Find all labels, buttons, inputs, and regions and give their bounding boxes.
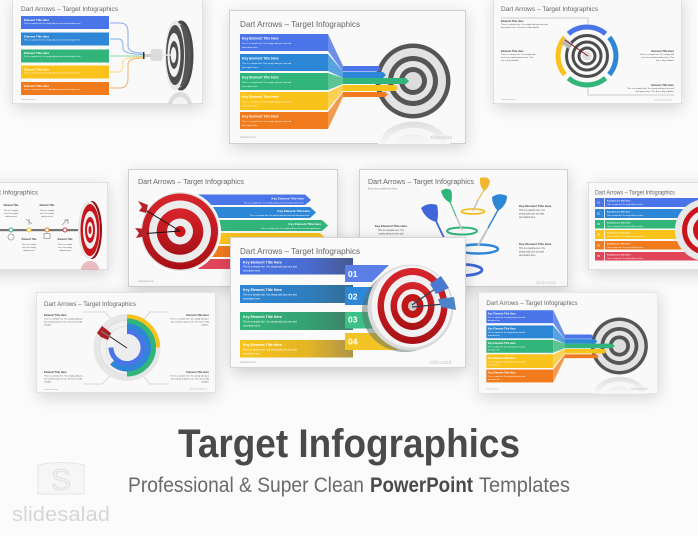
- panel: slide stacked arrows bottom right: This is a sample text. You simply add your text and: [488, 331, 525, 334]
- panel: featured slide numbered bars centre: Key Element Title Here: [243, 315, 282, 319]
- panel: slide stacked arrows bottom right: This is a sample text. You simply add your text and: [488, 360, 525, 363]
- panel: slide stacked arrows top centre: slidesalad: [430, 135, 452, 141]
- panel: featured slide numbered bars centre: Key Element Title Here: [243, 260, 282, 264]
- panel: slide stacked arrows bottom right: Key Element Title Here: [488, 341, 516, 345]
- panel: featured slide numbered bars centre: slidesalad.com: [240, 361, 256, 364]
- panel: featured slide numbered bars centre: 02: [348, 292, 358, 302]
- panel: slide timeline left: Element Title: [40, 204, 55, 207]
- panel: slide stacked arrows bottom right: This is a sample text. You simply add your text and: [488, 375, 525, 378]
- panel: slide flying darts: This is a sample text. You: [519, 209, 546, 212]
- panel: slide timeline left: add your text: [5, 215, 17, 218]
- panel: slide concentric arcs bottom left: slidesalad.com: [44, 389, 59, 391]
- panel: slide timeline left: [0, 182, 108, 279]
- panel: slide stacked arrows top centre: This is a sample text. You simply add your text and: [242, 81, 292, 84]
- panel: featured slide numbered bars centre: description here.: [243, 352, 261, 356]
- panel: slide ring target top right: Element Title Here: [501, 19, 524, 23]
- panel: slide stacked arrows bottom right: Key Element Title Here: [488, 327, 516, 331]
- panel: slide ring target top right: This is a sample text. You simply add: [640, 53, 675, 56]
- panel: slide stacked arrows bottom right: This is a sample text. You simply add your text and: [488, 316, 525, 319]
- panel: slide stacked arrows top centre: This is a sample text. You simply add your text and: [242, 42, 292, 45]
- panel: slide connector lines top left: Dart Arrows – Target Infographics: [21, 6, 118, 13]
- panel: slide stacked arrows top centre: description here.: [242, 46, 259, 49]
- panel: slide connector lines top left: Element Title Here: [24, 34, 50, 38]
- panel: slide ring target top right: description here. This text is fully editable.: [635, 90, 674, 93]
- panel: slide red target banners: slidesalad.com: [138, 280, 154, 283]
- panel: slide stacked arrows bottom right: description here.: [488, 378, 501, 381]
- panel: slide timeline left: text. You simply: [58, 246, 72, 249]
- panel: slide timeline left: text. You simply: [22, 246, 36, 249]
- panel: slide ring target top right: text is fully editable.: [501, 59, 520, 62]
- panel: slide stacked arrows bottom right: Key Element Title Here: [488, 371, 516, 375]
- panel: slide numbered rows right: Key Element Title Here: [607, 210, 631, 214]
- panel: slide flying darts: Enter your subtitle line here: [368, 188, 398, 190]
- panel: slide numbered rows right: 06: [597, 254, 601, 258]
- panel: slide stacked arrows top centre: slidesalad.com: [240, 136, 256, 139]
- panel: featured slide numbered bars centre: This is a sample text. You simply add your text and: [243, 294, 297, 296]
- panel: slide flying darts: simply add your text and: [379, 232, 404, 236]
- panel: slide numbered rows right: 01: [597, 200, 601, 204]
- subtitle: PowerPoint: [370, 474, 473, 497]
- panel: slide stacked arrows top centre: Key Element Title Here: [242, 76, 279, 80]
- subtitle: Templates: [479, 474, 570, 497]
- panel: slide red target banners: [128, 170, 338, 291]
- panel: slide numbered rows right: This is a sample text. You simply add your text here: [607, 246, 643, 249]
- panel: slide stacked arrows bottom right: description here.: [488, 334, 501, 337]
- panel: slide stacked arrows bottom right: description here.: [488, 349, 501, 352]
- panel: slide timeline left: This is a sample: [22, 244, 37, 246]
- panel: slide connector lines top left: This is a sample text. You simply add your text and description here.: [24, 38, 81, 42]
- panel: slide concentric arcs bottom left: editable.: [44, 380, 52, 384]
- panel: slide flying darts: Dart Arrows – Target Infographics: [368, 177, 474, 186]
- panel: slide numbered rows right: This is a sample text. You simply add your text here: [607, 235, 643, 238]
- panel: slide stacked arrows top centre: Dart Arrows – Target Infographics: [240, 19, 360, 29]
- panel: slide connector lines top left: Element Title Here: [24, 84, 50, 88]
- panel: featured slide numbered bars centre: This is a sample text. You simply add your text and: [243, 348, 297, 352]
- logo wordmark: slidesalad: [12, 504, 110, 526]
- icon: slidesalad logo: S: [51, 464, 71, 497]
- panel: slide connector lines top left: This is a sample text. You simply add your text and description here.: [24, 88, 81, 91]
- panel: slide ring target top right: your text and description here. This: [642, 56, 674, 59]
- title: Target Infographics: [178, 422, 520, 466]
- panel: slide stacked arrows top centre: [230, 10, 466, 148]
- panel: slide connector lines top left: [12, 0, 203, 120]
- panel: slide concentric arcs bottom left: This is a sample text. You simply add your: [170, 318, 209, 320]
- panel: slide ring target top right: This is a sample text. You simply add: [501, 53, 536, 56]
- panel: slide stacked arrows bottom right: slidesalad.com: [486, 388, 499, 390]
- panel: slide ring target top right: Dart Arrows – Target Infographics: [501, 6, 598, 13]
- panel: slide ring target top right: This is a sample text. You simply add your text and: [627, 87, 675, 90]
- panel: slide numbered rows right: Key Element Title Here: [607, 254, 631, 256]
- panel: slide ring target top right: Element Title Here: [501, 49, 524, 53]
- panel: slide numbered rows right: 04: [597, 232, 601, 236]
- panel: slide concentric arcs bottom left: slidesalad: [189, 386, 207, 391]
- panel: slide numbered rows right: Key Element Title Here: [607, 242, 631, 246]
- panel: slide numbered rows right: This is a sample text. You simply add your text here: [607, 203, 643, 206]
- panel: slide numbered rows right: Dart Arrows – Target Infographics: [595, 190, 675, 196]
- panel: slide flying darts: slidesalad: [536, 280, 557, 285]
- panel: slide stacked arrows top centre: Key Element Title Here: [242, 114, 279, 118]
- panel: featured slide numbered bars centre: This is a sample text. You simply add your text and: [243, 320, 297, 324]
- panel: slide timeline left: This is a sample: [40, 210, 55, 212]
- panel: slide stacked arrows top centre: Key Element Title Here: [242, 36, 279, 40]
- panel: slide flying darts: simply add your text and: [519, 212, 545, 216]
- panel: slide connector lines top left: This is a sample text. You simply add your text and description here.: [24, 22, 81, 25]
- panel: slide stacked arrows top centre: This is a sample text. You simply add your text and: [242, 120, 292, 123]
- panel: featured slide numbered bars centre: This is a sample text. You simply add your text and: [243, 266, 297, 268]
- panel: slide timeline left: add your text: [23, 249, 35, 252]
- panel: slide connector lines top left: slidesalad.com: [21, 99, 36, 101]
- panel: slide connector lines top left: Element Title Here: [24, 68, 50, 72]
- panel: featured slide numbered bars centre: description here.: [243, 270, 261, 272]
- panel: slide concentric arcs bottom left: [36, 292, 216, 397]
- panel: slide ring target top right: Element Title Here: [651, 83, 675, 87]
- panel: slide stacked arrows bottom right: Key Element Title Here: [488, 311, 516, 315]
- panel: slide ring target top right: text is fully editable.: [656, 59, 674, 62]
- panel: slide concentric arcs bottom left: text and description here. This text is fully: [171, 320, 210, 324]
- panel: featured slide numbered bars centre: description here.: [243, 324, 261, 328]
- panel: slide stacked arrows top centre: description here.: [242, 124, 259, 127]
- panel: slide concentric arcs bottom left: Element Title Here: [44, 313, 67, 317]
- panel: slide numbered rows right: Key Element Title Here: [607, 222, 631, 224]
- panel: slide timeline left: Element Title: [22, 238, 37, 241]
- panel: slide ring target top right: [493, 0, 682, 108]
- panel: slide stacked arrows top centre: This is a sample text. You simply add your text and: [242, 62, 292, 65]
- panel: slide numbered rows right: 03: [597, 222, 601, 226]
- panel: slide connector lines top left: This is a sample text. You simply add your text and description here.: [24, 72, 81, 74]
- panel: slide numbered rows right: [588, 182, 698, 274]
- panel: slide red target banners: Key Element Title Here: [289, 222, 321, 226]
- panel: featured slide numbered bars centre: [230, 238, 466, 372]
- panel: slide connector lines top left: Element Title Here: [24, 18, 50, 22]
- panel: slide connector lines top left: Element Title Here: [24, 51, 50, 55]
- panel: slide stacked arrows top centre: description here.: [242, 104, 259, 108]
- panel: slide flying darts: [360, 170, 568, 291]
- panel: slide concentric arcs bottom left: Element Title Here: [44, 370, 67, 374]
- panel: slide stacked arrows bottom right: description here.: [488, 363, 501, 366]
- icon: slidesalad logo: [38, 462, 84, 497]
- panel: slide concentric arcs bottom left: This is a sample text. You simply add your: [44, 374, 83, 378]
- panel: slide numbered rows right: This is a sample text. You simply add your text here: [607, 257, 643, 260]
- panel: featured slide numbered bars centre: 01: [348, 269, 358, 279]
- panel: slide ring target top right: slidesalad.com: [501, 99, 516, 101]
- panel: slide numbered rows right: Key Element Title Here: [607, 200, 631, 202]
- panel: slide flying darts: This is a sample text. You: [519, 247, 546, 250]
- panel: slide stacked arrows top centre: Key Element Title Here: [242, 56, 279, 60]
- panel: slide ring target top right: description here. This text is fully editable.: [501, 26, 540, 29]
- panel: slide stacked arrows top centre: Key Element Title Here: [242, 95, 279, 99]
- panel: slide connector lines top left: This is a sample text. You simply add your text and description here.: [24, 55, 81, 58]
- panel: slide flying darts: Key Element Title Here: [519, 204, 552, 208]
- panel: slide flying darts: Key Element Title Here: [519, 242, 552, 246]
- panel: slide ring target top right: This is a sample text. You simply add your text and: [501, 23, 549, 26]
- panel: slide red target banners: Key Element Title Here: [272, 196, 304, 200]
- panel: slide red target banners: Key Element Title Here: [278, 209, 310, 213]
- panel: slide stacked arrows bottom right: [478, 292, 659, 397]
- panel: slide timeline left: add your text: [59, 249, 71, 252]
- panel: slide red target banners: This is a sample text. You simply add your text and description here.: [250, 214, 310, 217]
- panel: slide timeline left: Element Title: [4, 204, 19, 207]
- panel: slide ring target top right: your text and description here. This: [501, 56, 533, 59]
- panel: slide stacked arrows bottom right: slidesalad: [631, 387, 648, 391]
- panel: slide numbered rows right: This is a sample text. You simply add your text here: [607, 225, 643, 228]
- panel: slide flying darts: description here.: [519, 254, 536, 257]
- panel: slide concentric arcs bottom left: text and description here. This text is fully: [44, 320, 83, 324]
- panel: slide ring target top right: Element Title Here: [651, 49, 675, 53]
- subtitle: Professional & Super Clean: [128, 474, 364, 497]
- panel: slide timeline left: text. You simply: [4, 212, 18, 215]
- panel: slide concentric arcs bottom left: This is a sample text. You simply add your: [170, 374, 209, 378]
- panel: slide flying darts: description here.: [519, 216, 536, 219]
- panel: featured slide numbered bars centre: Key Element Title Here: [243, 288, 282, 292]
- panel: slide concentric arcs bottom left: Dart Arrows – Target Infographics: [44, 301, 136, 308]
- panel: slide concentric arcs bottom left: This is a sample text. You simply add your: [44, 318, 83, 320]
- panel: slide timeline left: text. You simply: [40, 212, 54, 215]
- panel: slide numbered rows right: 02: [597, 212, 601, 216]
- panel: slide timeline left: add your text: [41, 215, 53, 218]
- panel: slide numbered rows right: This is a sample text. You simply add your text here: [607, 214, 643, 217]
- panel: featured slide numbered bars centre: Key Element Title Here: [243, 343, 282, 347]
- panel: slide concentric arcs bottom left: editable.: [201, 380, 209, 384]
- panel: featured slide numbered bars centre: 03: [348, 314, 358, 324]
- panel: featured slide numbered bars centre: slidesalad: [429, 360, 451, 366]
- panel: slide timeline left: This is a sample: [4, 210, 19, 212]
- panel: slide timeline left: Element Title: [58, 238, 73, 241]
- panel: slide flying darts: This is a sample text. You: [378, 229, 405, 232]
- panel: slide red target banners: This is a sample text. You simply add your text and description here.: [244, 202, 304, 204]
- panel: slide stacked arrows top centre: This is a sample text. You simply add your text and: [242, 100, 292, 104]
- panel: featured slide numbered bars centre: Dart Arrows – Target Infographics: [240, 246, 360, 256]
- panel: slide flying darts: Key Element Title Here: [375, 224, 408, 228]
- panel: slide concentric arcs bottom left: editable.: [44, 324, 52, 326]
- panel: slide red target banners: Dart Arrows – Target Infographics: [138, 177, 244, 186]
- panel: slide timeline left: This is a sample: [58, 244, 73, 246]
- panel: slide numbered rows right: Key Element Title Here: [607, 232, 631, 234]
- panel: slide flying darts: simply add your text and: [519, 250, 545, 254]
- subtitle: [128, 474, 570, 497]
- panel: slide stacked arrows bottom right: description here.: [488, 319, 501, 322]
- panel: slide ring target top right: slidesalad: [654, 97, 672, 102]
- panel: slide numbered rows right: 05: [597, 244, 601, 248]
- panel: slide stacked arrows bottom right: Dart Arrows – Target Infographics: [486, 300, 578, 307]
- panel: slide stacked arrows bottom right: Key Element Title Here: [488, 356, 516, 360]
- panel: featured slide numbered bars centre: 04: [348, 336, 358, 346]
- panel: slide concentric arcs bottom left: editable.: [201, 324, 209, 326]
- panel: slide stacked arrows top centre: description here.: [242, 85, 259, 88]
- panel: slide concentric arcs bottom left: Element Title Here: [186, 370, 210, 374]
- panel: slide concentric arcs bottom left: text and description here. This text is fully: [44, 378, 83, 380]
- panel: slide stacked arrows top centre: description here.: [242, 66, 259, 69]
- panel: slide red target banners: This is a sample text. You simply add your text and description here.: [261, 227, 321, 230]
- panel: slide concentric arcs bottom left: Element Title Here: [186, 313, 210, 317]
- panel: slide stacked arrows bottom right: This is a sample text. You simply add your text and: [488, 345, 525, 348]
- panel: slide concentric arcs bottom left: text and description here. This text is fully: [171, 378, 210, 380]
- panel: featured slide numbered bars centre: description here.: [243, 298, 261, 300]
